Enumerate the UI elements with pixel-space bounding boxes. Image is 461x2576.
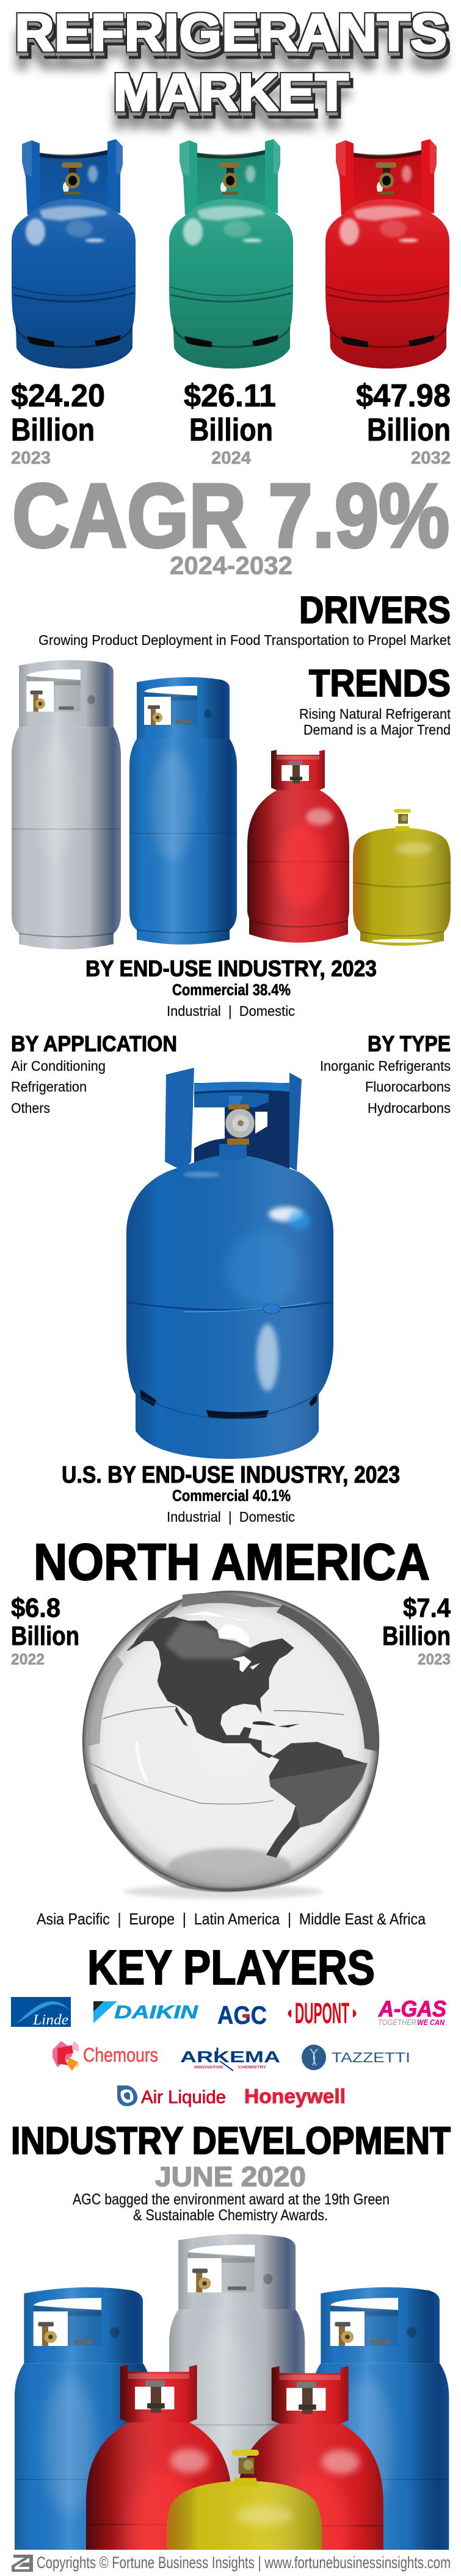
icon: blue cylinder <box>129 677 237 944</box>
logo: Tazzetti: TAZZETTI <box>332 2049 410 2065</box>
item: Air Conditioning <box>11 1058 106 1074</box>
other regions: Asia Pacific | Europe | Latin America | Middle East & Africa <box>37 1910 426 1928</box>
icon: left blue cylinder <box>15 2287 148 2550</box>
leading segment: Commercial 38.4% <box>172 980 291 999</box>
trends heading: TRENDS <box>309 663 451 705</box>
development date: JUNE 2020 <box>155 2161 306 2192</box>
CAGR period: 2024-2032 <box>170 551 292 580</box>
footer <box>12 2553 451 2572</box>
value: $47.98 <box>356 378 451 414</box>
logo: Linde <box>11 1997 71 2028</box>
year: 2024 <box>211 448 251 468</box>
line 1: AGC bagged the environment award at the 19th Green <box>73 2191 390 2208</box>
value: $7.4 <box>403 1593 451 1623</box>
heading: BY TYPE <box>368 1031 451 1056</box>
logo: A-Gas: WE CAN <box>417 2018 445 2027</box>
value: $24.20 <box>11 378 105 414</box>
line 2: Demand is a Major Trend <box>303 722 451 738</box>
item: Fluorocarbons <box>365 1079 451 1095</box>
logo: Daikin: DAIKIN <box>114 2001 198 2023</box>
Caribbean islands <box>253 1721 300 1727</box>
logo: A-Gas: TOGETHER <box>378 2018 416 2027</box>
trends text <box>299 706 451 738</box>
logo: Daikin <box>93 2001 198 2023</box>
region heading: NORTH AMERICA <box>34 1533 430 1591</box>
logo: Tazzetti <box>302 2045 410 2070</box>
end-use heading: BY END-USE INDUSTRY, 2023 <box>85 956 377 981</box>
logo: Chemours: Chemours <box>83 2044 158 2066</box>
logo: Chemours <box>53 2041 158 2071</box>
South America <box>266 1742 368 1858</box>
item: Others <box>11 1100 50 1116</box>
line 1: Rising Natural Refrigerant <box>299 706 451 722</box>
icon: large blue cylinder <box>126 1068 333 1459</box>
logo: Arkema <box>180 2048 280 2071</box>
icon: silver cylinder <box>12 660 121 949</box>
logo: Arkema: ARKEMA <box>180 2048 280 2066</box>
icon: right blue cylinder <box>315 2287 449 2550</box>
market size 2024 <box>184 378 276 468</box>
icon: red cylinder <box>247 750 349 943</box>
region value 2022 <box>11 1593 79 1668</box>
year: 2022 <box>11 1651 45 1668</box>
item: Hydrocarbons <box>368 1100 451 1116</box>
logo: A-Gas: A-GAS <box>378 1996 446 2021</box>
by type panel <box>320 1031 451 1116</box>
by application panel <box>11 1031 177 1116</box>
cylinder group <box>15 2234 449 2576</box>
logo: Air Liquide: Air Liquide <box>141 2087 226 2107</box>
title <box>15 4 447 122</box>
item: Refrigeration <box>11 1079 87 1095</box>
icon: green cylinder 2024 <box>169 139 293 369</box>
North America <box>129 1617 294 1758</box>
logo: Arkema: CHEMISTRY <box>238 2066 266 2070</box>
key players heading: KEY PLAYERS <box>87 1940 375 1995</box>
item: Inorganic Refrigerants <box>320 1058 451 1074</box>
value: $26.11 <box>184 378 276 414</box>
icon: left red cylinder <box>86 2365 231 2550</box>
title line 2: MARKET <box>113 63 349 122</box>
icon: red cylinder 2032 <box>325 139 449 369</box>
U.S. other segments: Industrial | Domestic <box>167 1509 295 1525</box>
development text <box>73 2191 390 2224</box>
year: 2032 <box>411 448 451 468</box>
other segments: Industrial | Domestic <box>167 1003 295 1019</box>
logo: Honeywell: Honeywell <box>244 2085 346 2107</box>
logo: AGC: AGC <box>217 2001 267 2029</box>
unit: Billion <box>11 412 95 448</box>
year: 2023 <box>11 448 51 468</box>
market size 2032 <box>356 378 451 468</box>
line 2: & Sustainable Chemistry Awards. <box>133 2207 328 2224</box>
globe <box>82 1591 379 1899</box>
value: $6.8 <box>11 1593 60 1623</box>
year: 2023 <box>418 1651 451 1668</box>
heading: BY APPLICATION <box>11 1031 177 1056</box>
unit: Billion <box>189 412 273 448</box>
title line 1: REFRIGERANTS <box>15 4 447 62</box>
icon: yellow cylinder <box>353 809 451 946</box>
logo: Arkema: INNOVATIVE <box>194 2066 223 2070</box>
text: DUPONT <box>295 1998 349 2030</box>
icon: right red cylinder <box>239 2366 383 2550</box>
unit: Billion <box>11 1621 79 1651</box>
logo: Linde: Linde <box>32 2012 68 2028</box>
Hudson Bay and lakes <box>183 1611 260 1672</box>
market size 2023 <box>11 378 105 468</box>
logo: DuPont <box>288 1998 357 2030</box>
icon: yellow cylinder front <box>167 2450 322 2550</box>
region value 2023 <box>382 1593 451 1668</box>
U.S. heading: U.S. BY END-USE INDUSTRY, 2023 <box>62 1462 400 1488</box>
icon: Fortune Business Insights logo <box>12 2555 33 2572</box>
continent highlight <box>165 1621 250 1659</box>
icon: silver cylinder back <box>169 2234 305 2481</box>
U.S. leading segment: Commercial 40.1% <box>172 1486 291 1505</box>
icon: blue cylinder 2023 <box>12 139 136 369</box>
